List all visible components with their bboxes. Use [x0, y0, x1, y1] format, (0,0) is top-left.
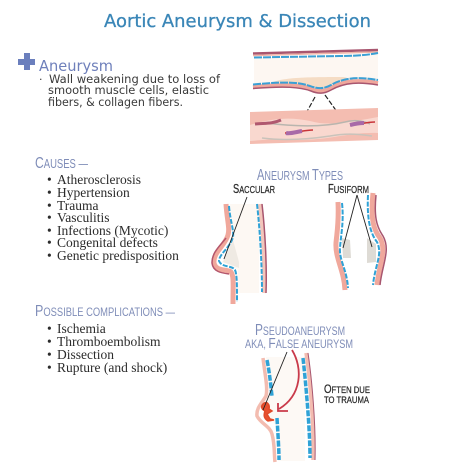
pointers — [343, 195, 372, 248]
label: fusiform: FUSIFORM — [328, 181, 369, 196]
causes list — [47, 172, 179, 263]
right wall — [306, 353, 313, 460]
complications list: Ischemia — [57, 321, 106, 336]
zoom lines — [293, 95, 345, 137]
heading: false aneurysm: AKA, FALSE ANEURYSM — [245, 335, 353, 352]
causes list: • — [47, 235, 52, 250]
lumen — [254, 53, 378, 91]
causes list: • — [47, 248, 52, 263]
complications list: • — [47, 360, 52, 375]
panel: complications — [35, 303, 175, 375]
complications list: Dissection — [57, 347, 114, 362]
left wall — [257, 358, 275, 462]
causes list: Genetic predisposition — [57, 248, 179, 263]
right wall — [372, 193, 383, 285]
causes list: Atherosclerosis — [57, 172, 141, 187]
causes list: • — [47, 210, 52, 225]
definition text — [39, 73, 221, 109]
heading: aneurysm types: ANEURYSM TYPES — [257, 167, 343, 184]
lumen — [222, 204, 259, 293]
heading: aneurysm: Aneurysm — [39, 57, 113, 75]
left wall — [336, 202, 345, 290]
label: often due to trauma — [324, 382, 370, 406]
causes list: • — [47, 198, 52, 213]
label: saccular: SACCULAR — [233, 181, 275, 196]
definition text: Wall weakening due to loss of — [49, 73, 221, 86]
heading: possible complications: POSSIBLE COMPLICATIONS — — [35, 303, 175, 320]
lumen — [262, 357, 305, 461]
blood clot — [262, 403, 274, 421]
diagram: fusiform aneurysm — [328, 181, 386, 290]
diagram: pseudoaneurysm — [245, 322, 370, 462]
complications list — [47, 321, 167, 375]
definition text: smooth muscle cells, elastic — [48, 84, 209, 97]
causes list: Congenital defects — [57, 235, 158, 250]
causes list: • — [47, 172, 52, 187]
diagram: saccular aneurysm — [212, 181, 275, 304]
complications list: Thromboembolism — [57, 334, 161, 349]
pointer — [224, 197, 247, 259]
upper wall — [253, 50, 378, 54]
panel: causes — [35, 155, 179, 263]
wall tissue section — [250, 108, 378, 144]
causes list: Vasculitis — [57, 210, 110, 225]
label: often due to trauma: TO TRAUMA — [324, 395, 370, 406]
label: often due to trauma: OFTEN DUE — [324, 382, 370, 396]
complications list: • — [47, 321, 52, 336]
causes list: • — [47, 185, 52, 200]
panel: aneurysm definition — [18, 53, 221, 109]
definition text: · — [39, 73, 42, 86]
causes list: Infections (Mycotic) — [57, 223, 168, 238]
causes list: Trauma — [57, 198, 99, 213]
definition text: fibers, & collagen fibers. — [48, 96, 183, 109]
left wall — [214, 204, 233, 304]
icon: plus — [18, 53, 35, 70]
thrombus — [342, 238, 351, 258]
complications list: • — [47, 347, 52, 362]
right wall — [260, 204, 264, 293]
thrombus — [223, 240, 239, 268]
complications list: Rupture (and shock) — [57, 360, 167, 375]
red arrow — [278, 350, 299, 411]
title: Aortic Aneurysm & Dissection — [104, 11, 371, 32]
diagram: aorta wall — [250, 50, 378, 144]
plaque area — [273, 77, 347, 90]
pointer — [263, 352, 287, 410]
heading: pseudoaneurysm: PSEUDOANEURYSM — [255, 322, 345, 339]
causes list: Hypertension — [57, 185, 130, 200]
heading: causes: CAUSES — — [35, 155, 88, 172]
lower wall — [253, 81, 378, 91]
causes list: • — [47, 223, 52, 238]
complications list: • — [47, 334, 52, 349]
